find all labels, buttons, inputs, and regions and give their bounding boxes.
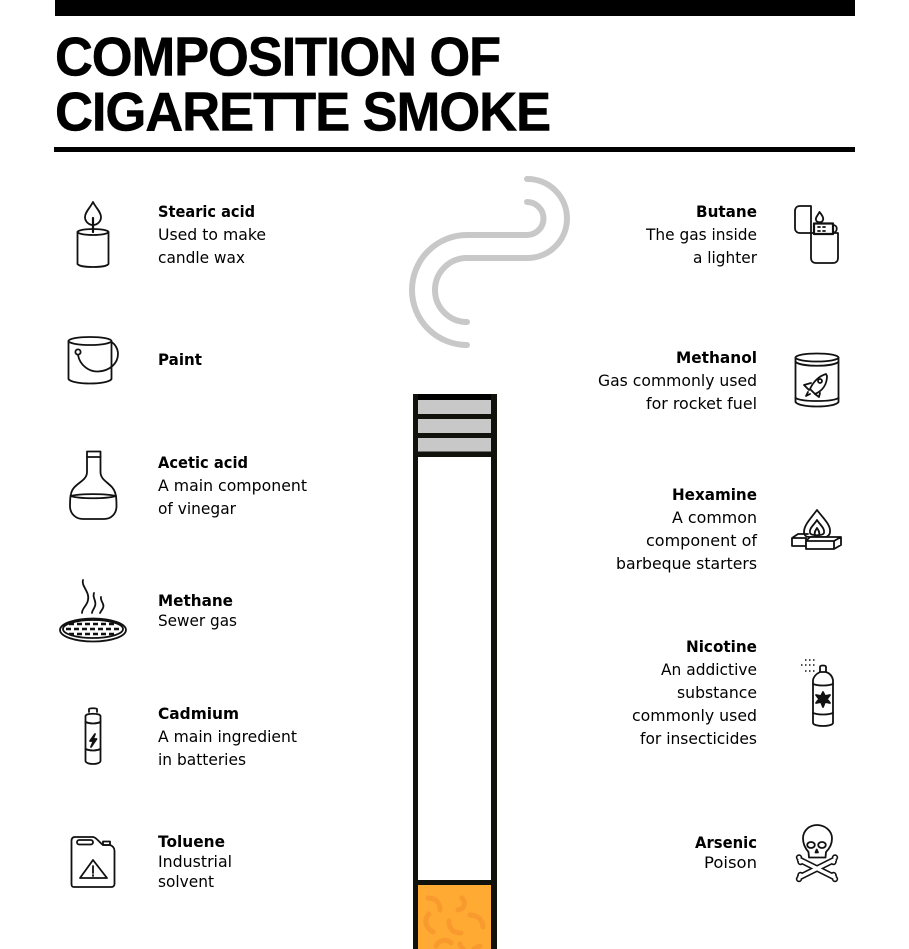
text: Toluene: solvent	[158, 872, 214, 891]
text: Acetic acid	[158, 453, 307, 518]
item: Acetic acid	[70, 452, 307, 519]
icon: paint bucket	[68, 337, 118, 384]
text: Cadmium: A main ingredient	[158, 727, 297, 746]
text: Nicotine: for insecticides	[640, 729, 757, 748]
text: Nicotine: Nicotine	[686, 637, 757, 656]
icon: campfire	[792, 510, 841, 549]
text: Methanol: Gas commonly used	[598, 371, 757, 390]
title	[55, 26, 550, 142]
text: Acetic acid: of vinegar	[158, 499, 236, 518]
icon: candle	[78, 202, 108, 267]
text: Stearic acid: candle wax	[158, 248, 245, 267]
text: Stearic acid	[158, 202, 266, 267]
icon: jerry can	[72, 837, 114, 887]
text: Paint: Paint	[158, 350, 202, 369]
smoke	[412, 179, 567, 345]
title: COMPOSITION OF	[55, 26, 500, 88]
icon: spray can	[801, 660, 833, 726]
text: Hexamine: A common	[672, 508, 757, 527]
text: Methanol: Methanol	[676, 348, 757, 367]
text: Arsenic: Arsenic	[695, 833, 757, 852]
text: Methane	[158, 591, 237, 630]
icon: skull and crossbones	[797, 825, 837, 881]
text: Nicotine: substance	[677, 683, 757, 702]
text: Hexamine: Hexamine	[672, 485, 757, 504]
item: Toluene	[72, 832, 232, 891]
cigarette	[413, 394, 497, 949]
item: Methane	[60, 580, 237, 642]
item: Arsenic	[695, 825, 837, 881]
text: Methane: Methane	[158, 591, 233, 610]
text: Arsenic	[695, 833, 757, 872]
text: Acetic acid: A main component	[158, 476, 307, 495]
text: Toluene: Toluene	[158, 832, 225, 851]
item: Butane	[645, 202, 838, 267]
icon: sewer grate	[60, 580, 126, 642]
icon: rocket fuel can	[796, 354, 838, 406]
text: Hexamine: component of	[646, 531, 757, 550]
text: Methanol: for rocket fuel	[646, 394, 757, 413]
text: Stearic acid: Stearic acid	[158, 202, 255, 221]
text: Hexamine	[616, 485, 757, 573]
text: Nicotine	[632, 637, 757, 748]
item: Paint	[68, 337, 202, 384]
top bar	[55, 0, 855, 16]
icon: lighter	[795, 206, 838, 263]
text: Cadmium	[158, 704, 297, 769]
text: Cadmium: in batteries	[158, 750, 246, 769]
text: Butane: a lighter	[693, 248, 757, 267]
text: Butane: Butane	[696, 202, 757, 221]
text: Methane: Sewer gas	[158, 611, 237, 630]
item: Nicotine	[632, 637, 833, 748]
text: Methanol	[598, 348, 757, 413]
tobacco strands	[426, 898, 483, 949]
text: Arsenic: Poison	[704, 853, 757, 872]
icon: flask	[70, 452, 116, 519]
text: Nicotine: An addictive	[661, 660, 757, 679]
item: Stearic acid	[78, 202, 266, 267]
text: Butane: The gas inside	[645, 225, 757, 244]
icon: battery	[86, 708, 100, 764]
text: Butane	[645, 202, 757, 267]
title: CIGARETTE SMOKE	[55, 80, 550, 142]
item: Cadmium	[86, 704, 297, 769]
text: Hexamine: barbeque starters	[616, 554, 757, 573]
item: Hexamine	[616, 485, 841, 573]
text: Nicotine: commonly used	[632, 706, 757, 725]
text: Toluene: Industrial	[158, 852, 232, 871]
text: Toluene	[158, 832, 232, 891]
text: Stearic acid: Used to make	[158, 225, 266, 244]
item: Methanol	[598, 348, 838, 413]
title rule	[54, 147, 855, 152]
text: Cadmium: Cadmium	[158, 704, 239, 723]
text: Acetic acid: Acetic acid	[158, 453, 248, 472]
